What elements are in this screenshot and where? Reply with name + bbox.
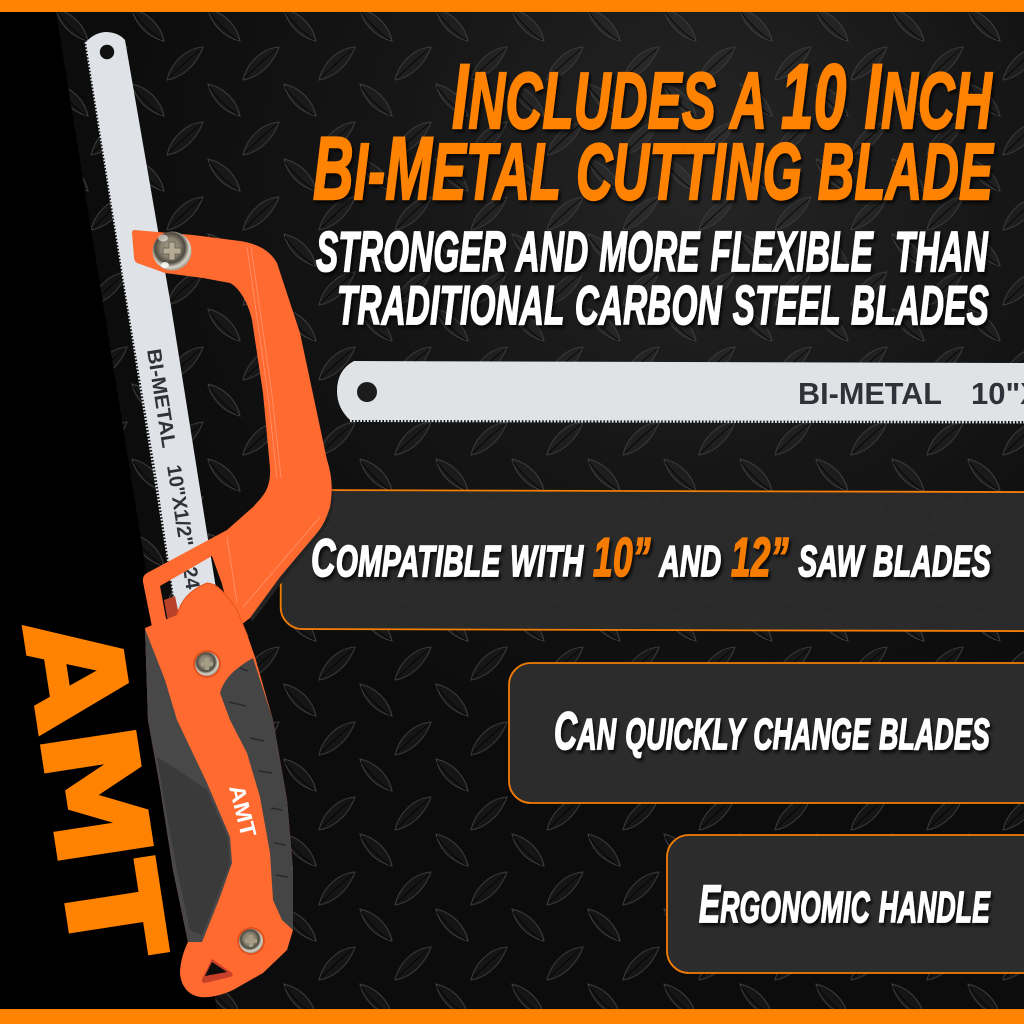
- horizontal bi-metal blade: BI-METAL: [798, 376, 942, 411]
- icon: top blade screw: [152, 232, 192, 270]
- left grip dark inset: [157, 757, 230, 935]
- left rubber grip: [145, 629, 232, 942]
- vertical saw blade: 24: [178, 565, 203, 592]
- saw frame: [132, 230, 334, 632]
- handle dome edge: [177, 583, 248, 637]
- vertical saw blade: [86, 32, 222, 625]
- bottom orange bar: [0, 1009, 1024, 1024]
- panel: ergonomic handle: [667, 835, 1024, 973]
- saw handle: [145, 583, 293, 997]
- icon: handle screw upper: [193, 650, 221, 678]
- black left wedge: [0, 0, 217, 1024]
- heading: includes a 10 inch bi-metal cutting blade: [313, 46, 994, 218]
- subheading: stronger and more flexible: [316, 220, 989, 336]
- hanging hole: [202, 959, 233, 983]
- top orange bar: [0, 0, 1024, 12]
- grip ribs: [229, 668, 288, 877]
- panel: quick blade change: [509, 663, 1024, 803]
- panel: compatible blades: [281, 490, 1024, 631]
- hanging hole dark opening: [205, 962, 227, 976]
- handle logo: AMT: [224, 782, 261, 840]
- vertical saw blade: 10"X1/2": [162, 463, 197, 548]
- vertical saw blade: BI-METAL: [142, 347, 179, 450]
- horizontal bi-metal blade: [337, 361, 1024, 422]
- icon: handle screw lower: [237, 927, 265, 955]
- right rubber grip: [220, 658, 293, 930]
